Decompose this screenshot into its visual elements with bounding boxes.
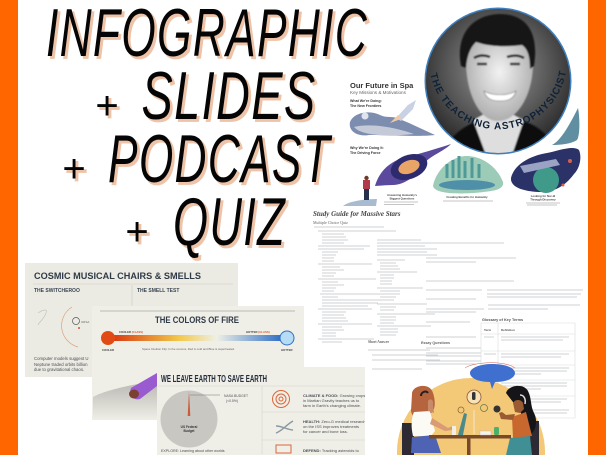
pie chart: Budget bbox=[184, 429, 195, 433]
title: + bbox=[98, 86, 121, 130]
benefit captions: HEALTH: Zero-G medical research bbox=[303, 419, 366, 424]
benefit captions: DEFEND: Tracking asteroids to bbox=[303, 448, 360, 453]
panel: study guide bbox=[313, 210, 583, 418]
panel: cosmic musical chairs slide: URSA bbox=[81, 320, 89, 324]
title: SLIDES bbox=[144, 60, 319, 136]
panel: space futures infographic: Why We're Doing It: bbox=[350, 146, 384, 150]
illustration: green city bbox=[433, 156, 503, 193]
title: PODCAST bbox=[110, 124, 335, 200]
benefit captions: in Martian Gravity teaches us to bbox=[303, 398, 360, 403]
glossary table bbox=[481, 318, 575, 418]
panel: space futures infographic: What We're Doing: bbox=[350, 99, 382, 103]
study guide heading: Study Guide for Massive Stars bbox=[313, 210, 401, 218]
title: PODCAST bbox=[108, 121, 333, 197]
panel: colors of fire slide: HOTTER (CLASS) bbox=[246, 330, 270, 334]
title: QUIZ bbox=[173, 184, 286, 260]
title: + bbox=[65, 150, 88, 194]
essay questions heading: Essay Questions bbox=[421, 341, 450, 345]
slide heading: COSMIC MUSICAL CHAIRS & SMELLS bbox=[34, 271, 201, 282]
panel: space futures infographic bbox=[343, 81, 580, 206]
infographic captions bbox=[387, 193, 556, 202]
illustration: earth and station bbox=[511, 148, 580, 193]
panel: space futures infographic: The New Frontiers bbox=[350, 104, 381, 108]
icon: shield bbox=[276, 445, 291, 453]
benefit captions: for cancer and bone loss. bbox=[303, 429, 348, 434]
temperature gradient bar bbox=[101, 331, 294, 345]
infographic captions: Through Discovery bbox=[530, 198, 556, 202]
illustration: galaxy bbox=[375, 144, 451, 186]
gray horizon bbox=[93, 381, 157, 420]
slide body text: due to gravitational chaos. bbox=[34, 367, 84, 372]
purple comet bbox=[129, 373, 157, 399]
benefit captions: on the ISS improves treatments bbox=[303, 424, 359, 429]
woman right bbox=[494, 386, 539, 455]
panel: colors of fire slide bbox=[92, 306, 304, 420]
short answer section: Short Answer bbox=[368, 340, 389, 344]
panel: cosmic musical chairs slide: THE SWITCHEROO bbox=[34, 288, 80, 294]
title: + bbox=[128, 212, 151, 256]
infographic captions: Biggest Questions bbox=[390, 196, 415, 200]
panel: study guide: Multiple Choice Quiz bbox=[313, 220, 348, 225]
slide body text: Neptune traded orbits billion bbox=[34, 362, 88, 367]
benefit captions: EXPLORE: Learning about other worlds bbox=[161, 449, 225, 453]
panel: colors of fire slide: Space Intuition Flip: In the cosmos, Red is cold and Blue is superheated. bbox=[142, 347, 235, 351]
orbit diagram bbox=[38, 307, 80, 347]
benefit captions: CLIMATE & FOOD: Growing crops bbox=[303, 393, 365, 398]
panel: colors of fire slide: COOLER bbox=[102, 348, 114, 352]
pie chart: US Federal bbox=[181, 425, 197, 429]
pie chart: NASA BUDGET bbox=[224, 394, 248, 398]
illustration: podcast hosts bbox=[397, 363, 545, 455]
title: + bbox=[95, 84, 119, 128]
panel: we leave earth slide bbox=[157, 367, 366, 455]
panel: space futures infographic: The Driving Force bbox=[350, 151, 381, 155]
table with laptop and cups bbox=[429, 410, 511, 455]
small podcast icon bbox=[467, 390, 481, 404]
infographic heading: Our Future in Spa bbox=[350, 81, 414, 90]
benefit captions: farm in Earth's changing climate. bbox=[303, 403, 361, 408]
glossary table: Glossary of Key Terms bbox=[482, 318, 523, 322]
speech bubble bbox=[465, 363, 515, 389]
icon: brain bbox=[272, 390, 290, 408]
infographic captions: Looking for Nor-Id bbox=[531, 194, 555, 198]
panel: space futures infographic: Key Missions & Motivations bbox=[350, 90, 407, 95]
glossary table: Term bbox=[484, 328, 491, 332]
title: QUIZ bbox=[176, 186, 289, 262]
infographic captions: Answering Humanity's bbox=[387, 193, 417, 197]
title: + bbox=[62, 147, 86, 191]
slide heading: WE LEAVE EARTH TO SAVE EARTH bbox=[161, 374, 267, 385]
panel: cosmic musical chairs slide: THE SMELL TEST bbox=[137, 288, 179, 294]
slide body text bbox=[34, 356, 88, 372]
pie chart bbox=[160, 390, 248, 448]
illustration: person on cliff bbox=[343, 176, 377, 206]
infographic captions: Creating Benefits for Humanity bbox=[446, 195, 488, 199]
pie chart: (<0.5%) bbox=[226, 399, 238, 403]
panel: cosmic musical chairs slide bbox=[25, 263, 238, 377]
slide heading: THE COLORS OF FIRE bbox=[155, 315, 239, 325]
portrait bbox=[452, 13, 546, 153]
title bbox=[46, 0, 370, 262]
slide body text: Computer models suggest U bbox=[34, 356, 88, 361]
woman left bbox=[402, 386, 453, 455]
panel: colors of fire slide: COOLER (CLASS) bbox=[119, 330, 143, 334]
panel: colors of fire slide: HOTTER bbox=[281, 348, 292, 352]
icon: dna bbox=[276, 421, 293, 433]
study guide text lines bbox=[314, 227, 583, 369]
illustration: moon base bbox=[350, 100, 435, 136]
title: SLIDES bbox=[142, 58, 316, 134]
title: + bbox=[125, 210, 149, 254]
illustration: cliff sliver bbox=[552, 108, 579, 145]
badge lettering: THE TEACHING ASTROPHYSICIST bbox=[430, 70, 566, 130]
photo badge: The Teaching Astrophysicist bbox=[424, 8, 572, 154]
glossary table: Definition bbox=[501, 328, 515, 332]
benefit captions bbox=[161, 393, 366, 453]
